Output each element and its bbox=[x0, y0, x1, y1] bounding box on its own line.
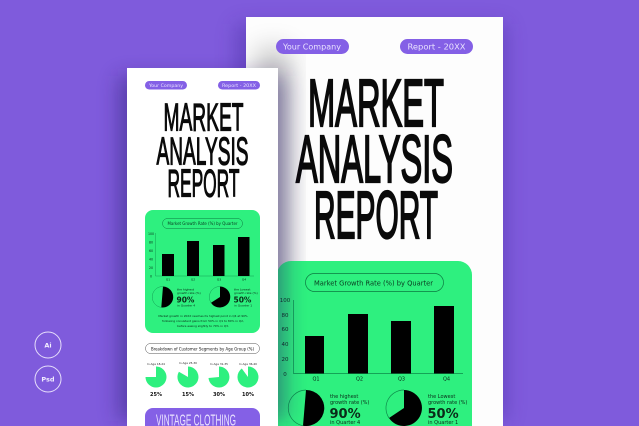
pie: age group 36-40 bbox=[237, 362, 258, 398]
bar chart bbox=[148, 232, 254, 282]
stat: lowest growth: the Lowest bbox=[428, 394, 455, 400]
panel: market growth bbox=[277, 261, 472, 426]
company pill bbox=[145, 81, 187, 90]
pie: age group 18-24: In Age 18-24 bbox=[147, 362, 165, 366]
pie: highest growth rate bbox=[152, 286, 173, 307]
pie: lowest growth rate bbox=[386, 390, 422, 426]
bar chart: 60 bbox=[282, 327, 289, 333]
chart title pill bbox=[306, 274, 444, 292]
stat: lowest growth: 50% bbox=[428, 407, 459, 422]
stat: highest growth: in Quarter 4 bbox=[177, 304, 195, 308]
company pill: Your Company bbox=[148, 83, 183, 89]
bar chart: 20 bbox=[149, 266, 153, 270]
stat: highest growth: growth rate (%) bbox=[177, 291, 201, 295]
stat: highest growth: the highest bbox=[330, 394, 358, 400]
segment heading pill: Breakdown of Customer Segments by Age Group (%) bbox=[151, 346, 254, 351]
panel: large report page bbox=[246, 17, 503, 426]
stat: highest growth bbox=[330, 394, 369, 426]
bar chart: 20 bbox=[282, 357, 289, 363]
stat: lowest growth: in Quarter 1 bbox=[428, 420, 458, 426]
pie: age group 31-35: 30% bbox=[213, 392, 225, 398]
bar chart: 100 bbox=[148, 232, 154, 236]
company pill bbox=[276, 39, 349, 54]
pie: age group 25-30: 15% bbox=[182, 392, 194, 398]
pie: age group 31-35 bbox=[208, 362, 229, 398]
stat: highest growth: 90% bbox=[330, 407, 361, 422]
title bbox=[296, 66, 453, 253]
summary text: before easing slightly to 70% in Q3. bbox=[177, 324, 229, 328]
bar chart: 0 bbox=[150, 274, 152, 278]
pie: age group 18-24: 25% bbox=[150, 392, 162, 398]
bar chart: Q3 bbox=[398, 376, 405, 382]
bar chart: 100 bbox=[280, 298, 291, 304]
pie: age group 25-30 bbox=[177, 361, 198, 398]
title: MARKET bbox=[308, 66, 444, 141]
title bbox=[156, 96, 248, 206]
bar chart: 40 bbox=[282, 342, 289, 348]
summary text: Market growth in 20XX reaches its highest point in Q4 at 90% bbox=[158, 314, 248, 318]
bar chart: 80 bbox=[282, 313, 289, 319]
bar chart: Q2 bbox=[356, 376, 363, 382]
pie: age group 25-30: In Age 25-30 bbox=[179, 361, 197, 365]
pie: age group 36-40: 10% bbox=[242, 392, 254, 398]
pie: lowest growth rate bbox=[209, 286, 230, 307]
report date pill bbox=[400, 39, 473, 54]
report date pill: Report - 20XX bbox=[408, 42, 466, 52]
icon: Psd badge: Psd bbox=[41, 376, 55, 384]
stat: highest growth: in Quarter 4 bbox=[330, 420, 360, 426]
stat: lowest growth: 50% bbox=[234, 296, 252, 304]
title: REPORT bbox=[314, 178, 438, 253]
segment heading pill bbox=[146, 344, 260, 354]
chart title pill: Market Growth Rate (%) by Quarter bbox=[168, 221, 238, 226]
stat: lowest growth: growth rate (%) bbox=[234, 291, 258, 295]
panel: small report page: ANALYSIS bbox=[156, 130, 248, 174]
bar chart: Q1 bbox=[312, 376, 320, 382]
stat: highest growth: 90% bbox=[176, 296, 195, 304]
panel: market growth bbox=[145, 210, 260, 333]
icon: Ai badge bbox=[35, 332, 61, 358]
icon: Psd badge bbox=[35, 366, 61, 392]
bar chart: Q4 bbox=[443, 376, 450, 382]
stat: highest growth: growth rate (%) bbox=[330, 400, 369, 406]
pie: age group 18-24 bbox=[146, 362, 166, 398]
bar chart: 0 bbox=[283, 372, 287, 378]
bar chart: 80 bbox=[149, 240, 153, 244]
bar chart: 40 bbox=[149, 258, 153, 262]
bar chart: Q4 bbox=[242, 278, 246, 282]
stat: lowest growth bbox=[428, 394, 467, 426]
panel: small report page bbox=[127, 68, 278, 426]
bar chart: 60 bbox=[149, 249, 153, 253]
bar chart: Q3 bbox=[217, 278, 221, 282]
pie: age group 31-35: In Age 31-35 bbox=[210, 362, 228, 366]
panel: vintage clothing bbox=[145, 408, 260, 426]
icon: Ai badge: Ai bbox=[44, 342, 52, 350]
title: REPORT bbox=[168, 162, 240, 206]
stat: highest growth: the highest bbox=[177, 288, 195, 292]
stat: highest growth bbox=[176, 288, 201, 308]
stat: lowest growth: the Lowest bbox=[234, 288, 251, 292]
panel: large report page: ANALYSIS bbox=[296, 122, 453, 197]
summary text: following consistent gains from 50% in Q1 to 80% in Q2, bbox=[162, 319, 244, 323]
stat: lowest growth: in Quarter 1 bbox=[234, 304, 252, 308]
stat: lowest growth: growth rate (%) bbox=[428, 400, 467, 406]
title: MARKET bbox=[164, 96, 244, 140]
pie: age group 36-40: In Age 36-40 bbox=[239, 362, 257, 366]
stat: lowest growth bbox=[234, 288, 258, 308]
pie: highest growth rate bbox=[288, 390, 324, 426]
chart title pill: Market Growth Rate (%) by Quarter bbox=[314, 278, 434, 288]
company pill: Your Company bbox=[282, 42, 341, 52]
report mockup scene bbox=[34, 17, 512, 426]
bar chart: Q2 bbox=[191, 278, 195, 282]
bar chart: Q1 bbox=[166, 278, 170, 282]
summary text bbox=[158, 314, 248, 328]
report date pill bbox=[218, 81, 260, 90]
report date pill: Report - 20XX bbox=[222, 83, 256, 89]
bar chart bbox=[280, 298, 463, 382]
